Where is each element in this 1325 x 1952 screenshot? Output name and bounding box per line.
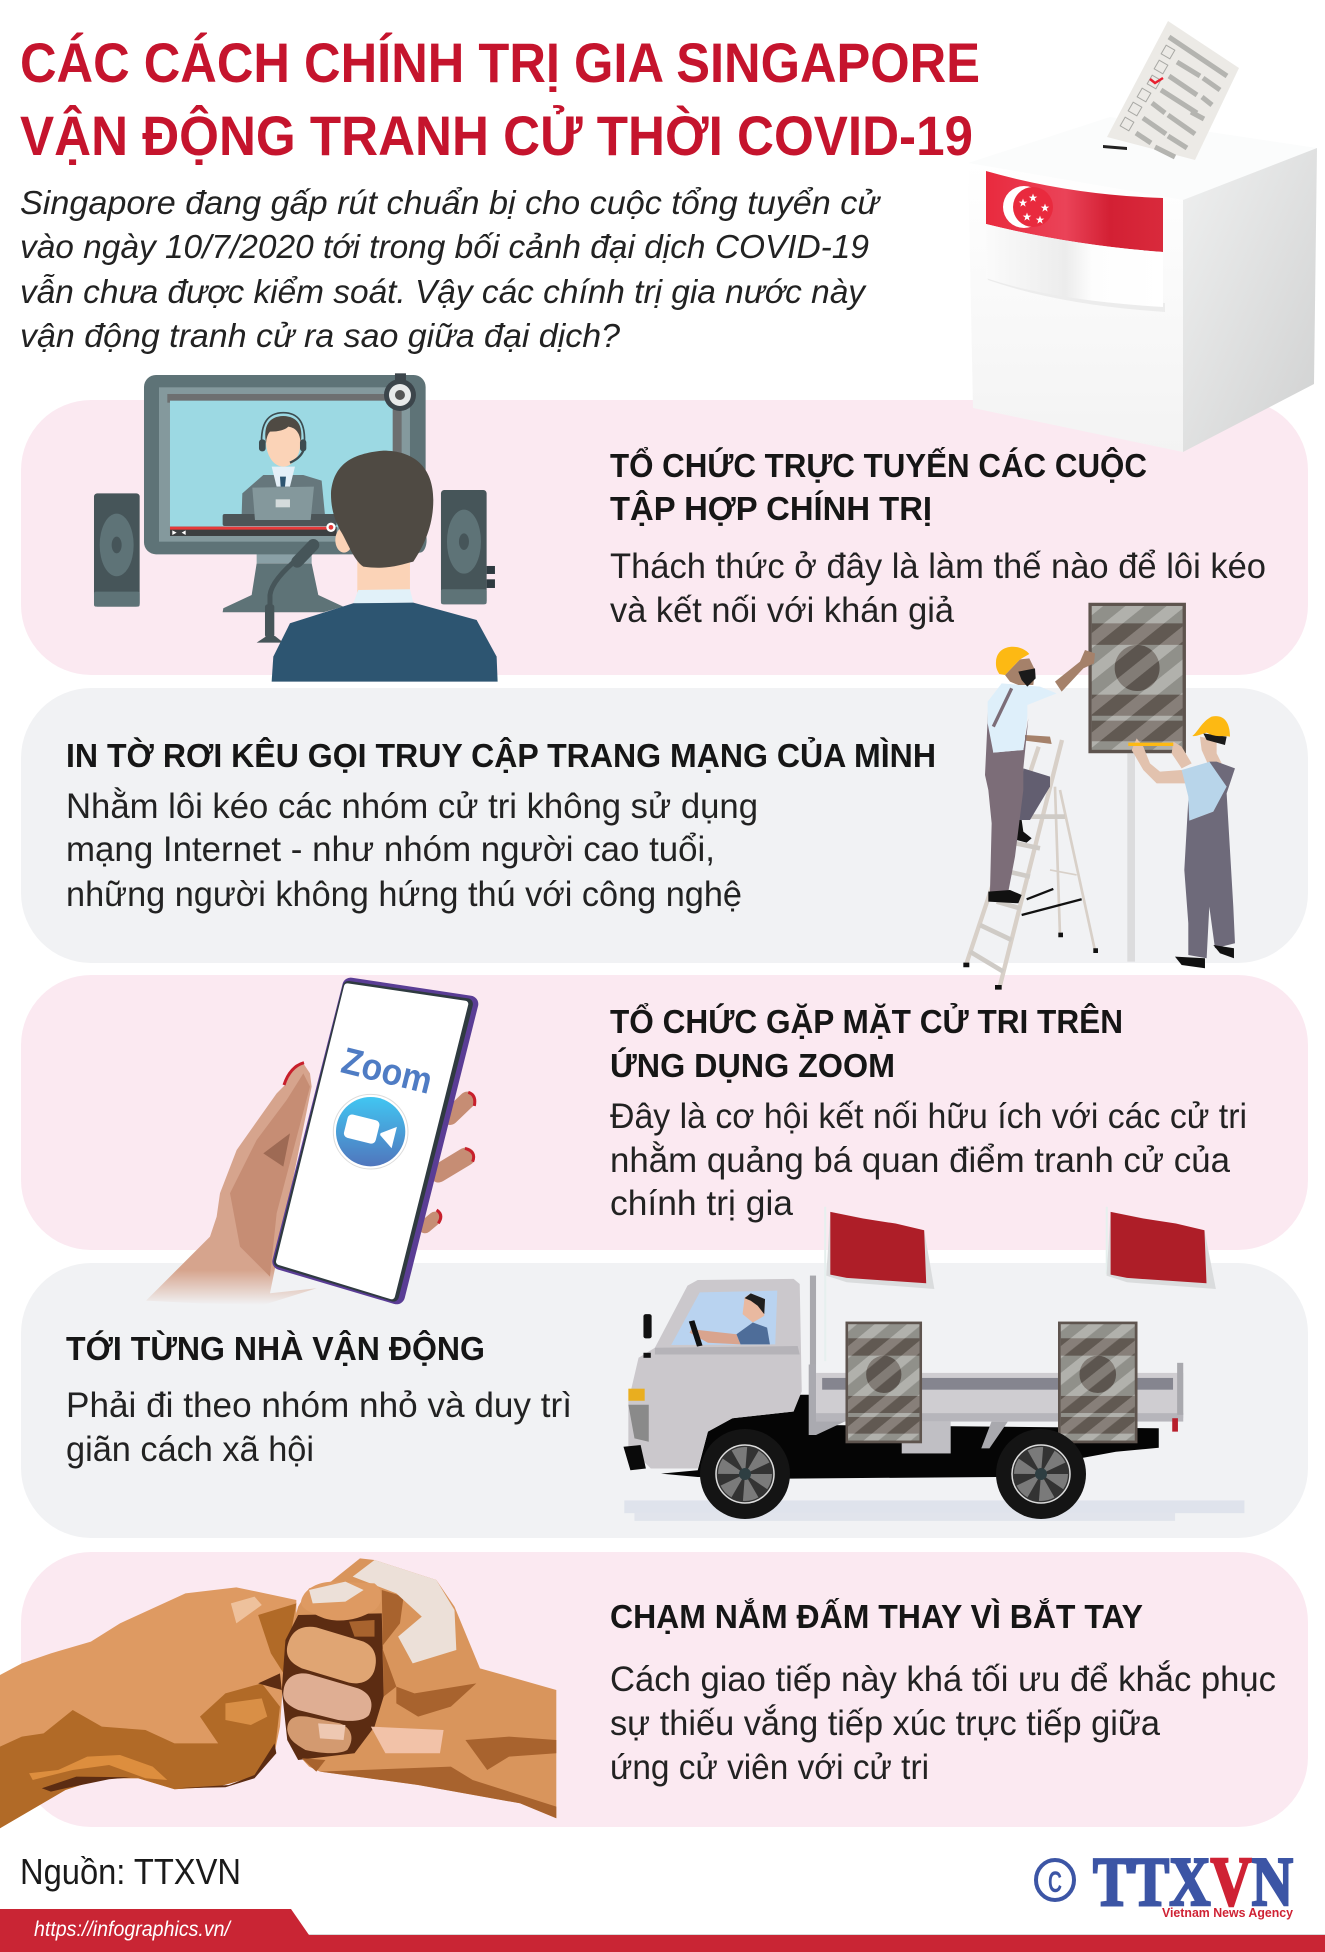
illustration: campaign truck: [623, 1207, 1244, 1521]
intro text: vẫn chưa được kiểm soát. Vậy các chính trị gia nước này: [20, 273, 868, 310]
panel: zoom meetings: nhằm quảng bá quan điểm tranh cử của: [610, 1141, 1231, 1180]
panel: fist bump: sự thiếu vắng tiếp xúc trực tiếp giữa: [610, 1704, 1161, 1743]
source text: Nguồn: TTXVN: [20, 1851, 241, 1892]
worker on ladder: [985, 647, 1095, 903]
panel: zoom meetings: chính trị gia: [610, 1184, 794, 1223]
panel: fist bump: ứng cử viên với cử tri: [610, 1748, 929, 1787]
panel: leaflets: mạng Internet - như nhóm người cao tuổi,: [66, 830, 715, 869]
intro text: Singapore đang gấp rút chuẩn bị cho cuộc tổng tuyển cử: [20, 184, 881, 221]
panel: fist bump: [21, 1552, 1308, 1827]
illustration: fist bump: [0, 1558, 556, 1828]
Zoom label: Zoom: [338, 1039, 437, 1102]
icon: microphone: [257, 545, 313, 643]
left fist: [0, 1587, 296, 1828]
panel: fist bump: CHẠM NẮM ĐẤM THAY VÌ BẮT TAY: [610, 1598, 1143, 1635]
panel: online rallies: TỔ CHỨC TRỰC TUYẾN CÁC CUỘC: [610, 446, 1147, 484]
panel: leaflets: [21, 688, 1308, 963]
panel: door to door: Phải đi theo nhóm nhỏ và duy trì: [66, 1386, 572, 1425]
truck bed: [809, 1276, 1183, 1453]
right fist: [282, 1558, 556, 1818]
panel: fist bump: Cách giao tiếp này khá tối ưu để khắc phục: [610, 1660, 1276, 1699]
illustration: man watching online rally on monitor: [94, 373, 498, 682]
icon: left speaker: [94, 493, 140, 607]
panel: online rallies: TẬP HỢP CHÍNH TRỊ: [610, 490, 932, 527]
phone: [279, 986, 470, 1296]
footer bar with URL: [0, 1909, 1325, 1952]
intro text: vận động tranh cử ra sao giữa đại dịch?: [20, 317, 621, 354]
panel: zoom meetings: TỔ CHỨC GẶP MẶT CỬ TRI TRÊN: [610, 1003, 1123, 1040]
viewer seen from behind: [272, 451, 498, 682]
icon: poster: [1088, 603, 1186, 753]
cab: [623, 1279, 802, 1470]
hand: [146, 1063, 475, 1305]
footer bar with URL: https://infographics.vn/: [34, 1918, 232, 1941]
intro text: [20, 184, 881, 354]
intro text: vào ngày 10/7/2020 tới trong bối cảnh đại dịch COVID-19: [20, 228, 869, 265]
logo: TTXVN: C: [1048, 1866, 1062, 1899]
panel: door to door: giãn cách xã hội: [66, 1430, 314, 1469]
logo: TTXVN: Vietnam News Agency: [1162, 1905, 1294, 1920]
panel: door to door: [21, 1263, 1308, 1538]
icon: truck wheels: [700, 1429, 1086, 1519]
icon: monitor: [144, 375, 426, 612]
panel: zoom meetings: [21, 975, 1308, 1250]
illustration: hand holding phone with Zoom: [146, 986, 475, 1305]
icon: webcam: [384, 373, 416, 411]
panel: leaflets: Nhằm lôi kéo các nhóm cử tri không sử dụng: [66, 787, 758, 826]
icon: right speaker: [441, 490, 495, 604]
icon: ballot box with Singapore flag: [968, 21, 1317, 452]
panel: online rallies: và kết nối với khán giả: [610, 591, 955, 630]
logo: TTXVN: TTXVN: [1093, 1844, 1293, 1921]
title: [20, 31, 980, 167]
illustration: two workers hanging a poster: [963, 603, 1235, 988]
panel: leaflets: IN TỜ RƠI KÊU GỌI TRUY CẬP TRANG MẠNG CỦA MÌNH: [66, 737, 936, 774]
panel: zoom meetings: ỨNG DỤNG ZOOM: [610, 1047, 895, 1084]
pole: [1127, 753, 1135, 962]
panel: online rallies: Thách thức ở đây là làm thế nào để lôi kéo: [610, 547, 1266, 586]
icon: Zoom logo: [333, 1094, 408, 1169]
icon: flags: [824, 1207, 1216, 1361]
panel: zoom meetings: Đây là cơ hội kết nối hữu ích với các cử tri: [610, 1097, 1247, 1136]
title: CÁC CÁCH CHÍNH TRỊ GIA SINGAPORE: [20, 31, 980, 94]
panel: door to door: TỚI TỪNG NHÀ VẬN ĐỘNG: [66, 1329, 485, 1367]
icon: truck speakers: [845, 1322, 1138, 1443]
panel: leaflets: những người không hứng thú với công nghệ: [66, 875, 742, 914]
panel: online rallies: [21, 400, 1308, 675]
icon: ladder: [963, 740, 1098, 988]
road: [624, 1500, 1244, 1521]
chassis: [661, 1395, 1159, 1479]
title: VẬN ĐỘNG TRANH CỬ THỜI COVID-19: [20, 104, 973, 167]
worker measuring: [1128, 716, 1235, 968]
